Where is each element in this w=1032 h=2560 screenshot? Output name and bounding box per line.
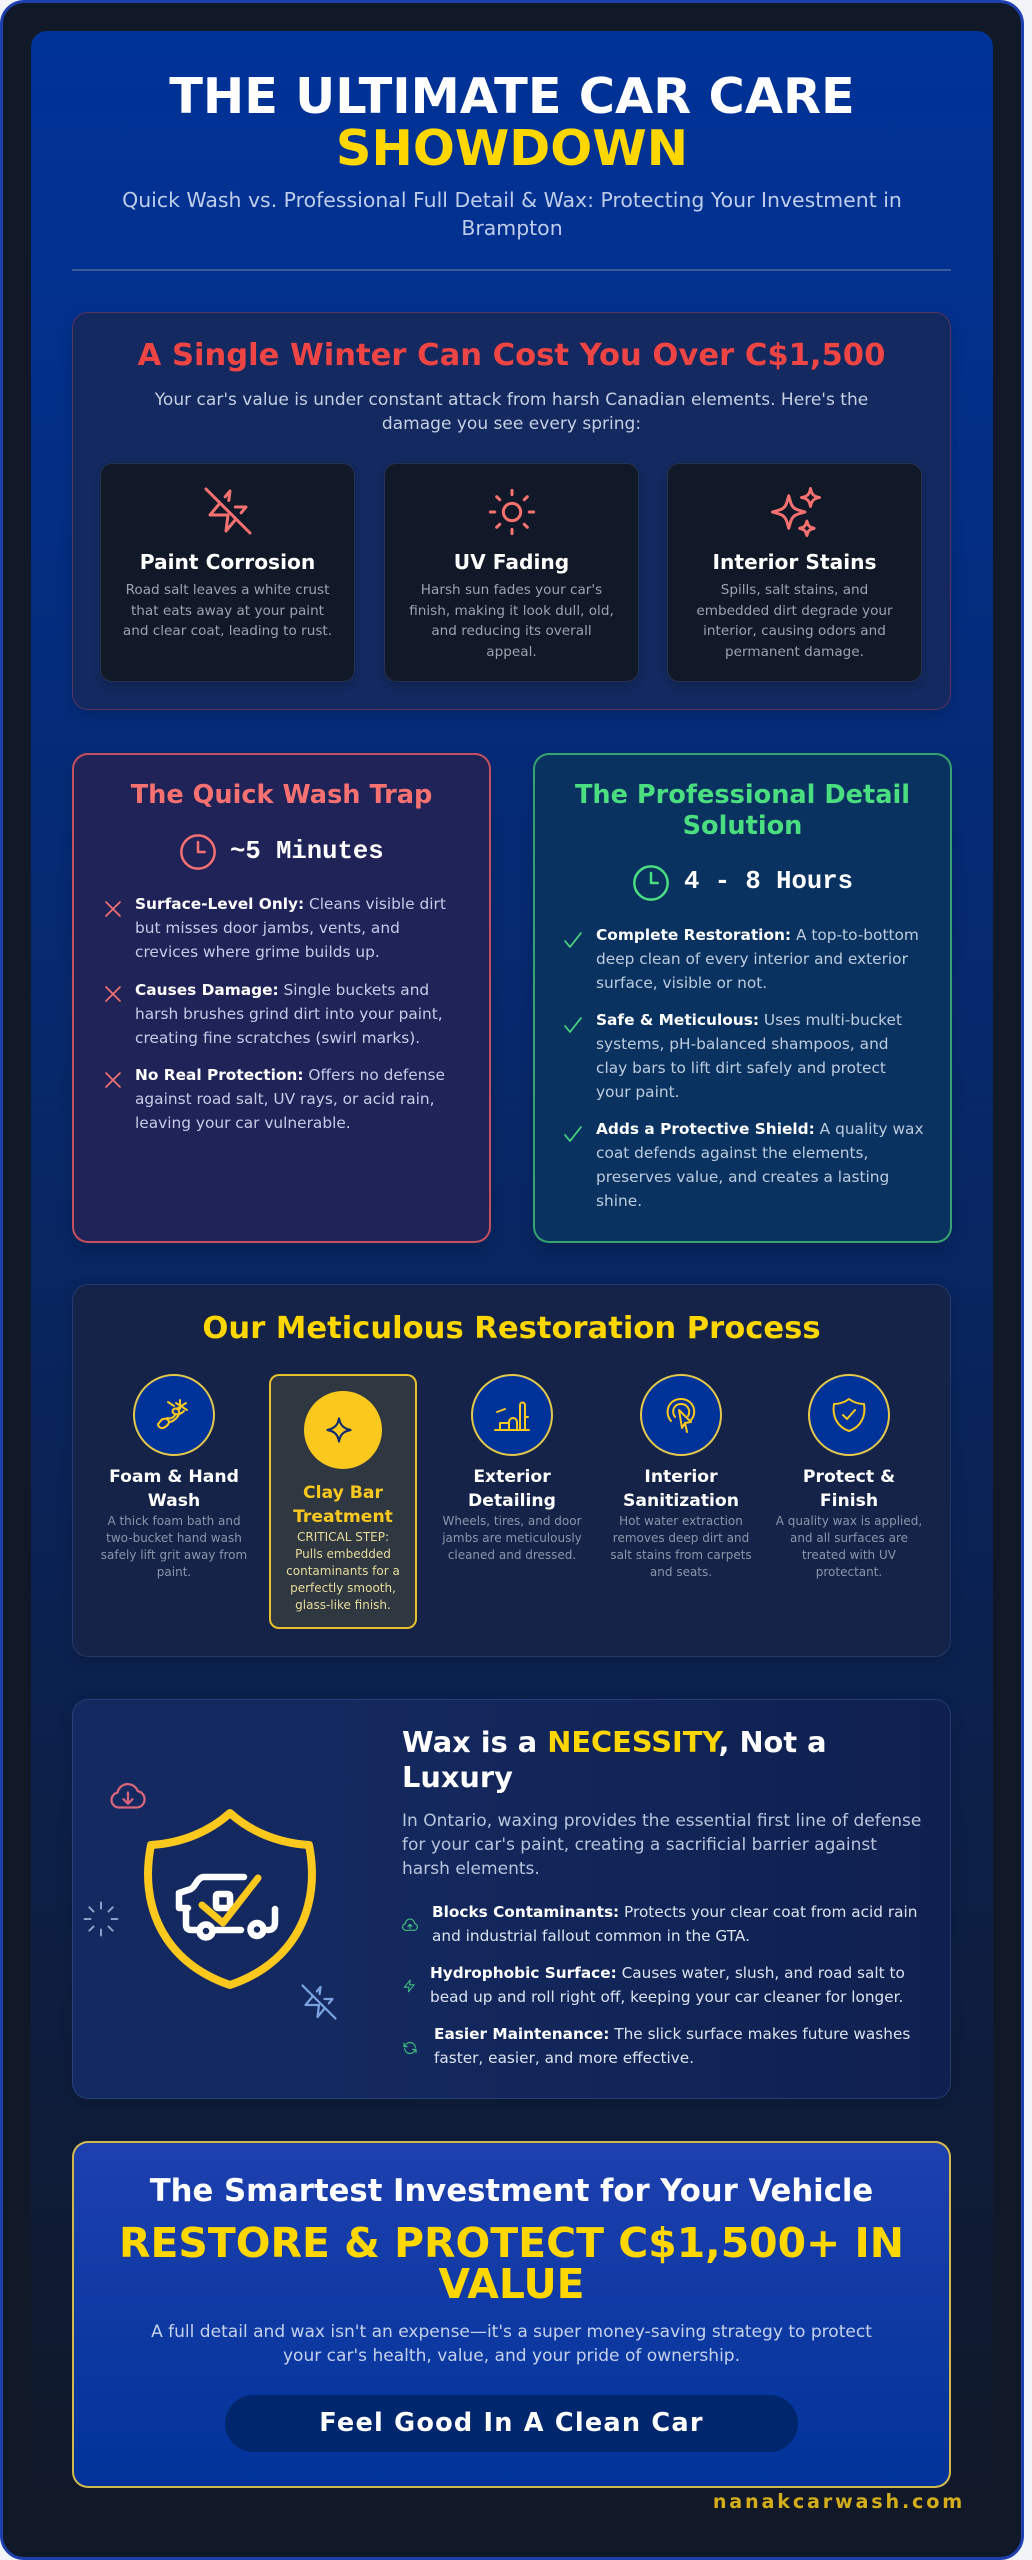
- step text: Hot water extraction: [619, 1514, 743, 1528]
- card text: Harsh sun fades your car's: [421, 582, 602, 598]
- step text: A quality wax is applied,: [776, 1514, 922, 1528]
- card text: interior, causing odors and: [703, 623, 886, 639]
- car icon: [179, 1877, 275, 1938]
- step title: [293, 1483, 393, 1527]
- heading: process: Our Meticulous Restoration Process: [202, 1311, 821, 1346]
- item: complete restoration: surface, visible or not.: [596, 974, 767, 992]
- heading: professional detail: The Professional Detail: [575, 780, 910, 810]
- time: 4-8 hours: 4 - 8 Hours: [684, 867, 853, 896]
- panel: call to action: [72, 2141, 951, 2488]
- card text: appeal.: [486, 644, 537, 660]
- title: THE ULTIMATE CAR CARE: [169, 67, 855, 125]
- icon: cloud: [402, 1917, 418, 1933]
- step text: Pulls embedded: [295, 1546, 391, 1560]
- icon: check: [564, 1126, 582, 1142]
- card text: permanent damage.: [725, 644, 864, 660]
- step title: Clay Bar: [303, 1483, 383, 1503]
- icon: sun: [488, 488, 536, 536]
- shield outline: [148, 1813, 312, 1985]
- step text: [776, 1514, 922, 1578]
- card text: Road salt leaves a white crust: [126, 582, 329, 598]
- step text: cleaned and dressed.: [448, 1548, 576, 1562]
- card text: finish, making it look dull, old,: [409, 602, 614, 618]
- card text: [409, 582, 614, 660]
- panel: winter damage: [72, 312, 951, 710]
- step: clay bar highlighted: [269, 1374, 417, 1629]
- benefit: easier maintenance: faster, easier, and more effective.: [434, 2049, 694, 2067]
- value statement: [72, 2223, 951, 2305]
- text: wax intro: [402, 1809, 921, 1881]
- item: safe and meticulous: clay bars to lift dirt safely and protect: [596, 1059, 886, 1077]
- benefit: easier maintenance: [434, 2022, 910, 2070]
- step: foam wash: [101, 1374, 247, 1578]
- card text: [123, 582, 332, 639]
- card: interior stains: [667, 463, 922, 682]
- card: uv fading: [384, 463, 639, 682]
- step title: [109, 1467, 239, 1511]
- item: surface level: [135, 895, 446, 961]
- item: safe and meticulous: your paint.: [596, 1083, 680, 1101]
- icon: clock green: [633, 865, 669, 901]
- step: interior sanitization: [610, 1374, 752, 1578]
- icon: sparkles: [771, 487, 821, 537]
- step text: removes deep dirt and: [613, 1530, 749, 1544]
- step title: Exterior: [473, 1467, 551, 1487]
- subtitle: Brampton: [461, 216, 563, 240]
- item: safe and meticulous: systems, pH-balanced shampoos, and: [596, 1035, 889, 1053]
- heading: wax: [402, 1725, 827, 1794]
- step title: [623, 1467, 739, 1511]
- icon: exterior bars: [471, 1374, 553, 1456]
- icon: clock red: [180, 834, 216, 870]
- step text: and all surfaces are: [790, 1530, 908, 1544]
- text: wax intro: for your car's paint, creating a sacrificial barrier against: [402, 1835, 877, 1855]
- step text: [101, 1514, 247, 1578]
- step text: treated with UV: [802, 1548, 896, 1562]
- item: no protection: leaving your car vulnerable.: [135, 1114, 351, 1132]
- item: causes damage: Causes Damage: Single buckets and: [135, 981, 429, 999]
- card text: Spills, salt stains, and: [721, 582, 868, 598]
- item: no protection: against road salt, UV rays, or acid rain,: [135, 1090, 435, 1108]
- text: damage intro: damage you see every spring:: [382, 414, 641, 434]
- icon: refresh: [402, 2040, 418, 2056]
- card text: and clear coat, leading to rust.: [123, 623, 332, 639]
- illustration: shield with car: [84, 1783, 337, 2020]
- step text: [286, 1530, 400, 1612]
- heading: professional detail: Solution: [683, 810, 802, 840]
- heading: winter cost: A Single Winter Can Cost You Over C$1,500: [138, 338, 885, 373]
- icon: x: [105, 986, 121, 1002]
- step: exterior detailing: [442, 1374, 582, 1562]
- step text: jambs are meticulously: [442, 1530, 582, 1544]
- icon: zap: [402, 1978, 416, 1994]
- item: no protection: No Real Protection: Offers no defense: [135, 1066, 445, 1084]
- title: SHOWDOWN: [336, 119, 688, 177]
- step title: [468, 1467, 556, 1511]
- item: complete restoration: Complete Restoration: A top-to-bottom: [596, 926, 919, 944]
- item: protective shield: preserves value, and creates a lasting: [596, 1168, 889, 1186]
- step title: [803, 1467, 895, 1511]
- icon: shield check: [808, 1374, 890, 1456]
- card text: and reducing its overall: [431, 623, 592, 639]
- value statement: RESTORE & PROTECT C$1,500+ IN: [119, 2219, 904, 2267]
- step text: [442, 1514, 582, 1562]
- title: [169, 67, 855, 177]
- step title: Interior: [644, 1467, 718, 1487]
- time: 5 minutes: ~5 Minutes: [230, 837, 384, 866]
- footer website: nanakcarwash.com: [713, 2490, 965, 2513]
- text: damage intro: [154, 390, 868, 434]
- benefit: blocks contaminants: Blocks Contaminants: Protects your clear coat from acid rain: [432, 1903, 917, 1921]
- benefit: blocks contaminants: and industrial fallout common in the GTA.: [432, 1927, 750, 1945]
- text: damage intro: Your car's value is under constant attack from harsh Canadian elements. Here's the: [155, 390, 868, 410]
- step title: Detailing: [468, 1491, 556, 1511]
- panel: wax necessity: [72, 1699, 951, 2099]
- step title: Finish: [820, 1491, 878, 1511]
- text: wax intro: harsh elements.: [402, 1859, 540, 1879]
- item: causes damage: creating fine scratches (swirl marks).: [135, 1029, 420, 1047]
- item: safe and meticulous: Safe & Meticulous: Uses multi-bucket: [596, 1011, 902, 1029]
- step title: Wash: [148, 1491, 200, 1511]
- item: protective shield: [596, 1120, 924, 1210]
- step title: Foam & Hand: [109, 1467, 239, 1487]
- icon: zap off: [204, 487, 252, 535]
- item: causes damage: [135, 981, 443, 1047]
- item: safe and meticulous: [596, 1011, 902, 1101]
- heading: smartest investment: The Smartest Investment for Your Vehicle: [150, 2174, 873, 2209]
- benefit: hydrophobic: bead up and roll right off, keeping your car cleaner for longer.: [430, 1988, 903, 2006]
- text: cta body: [72, 2320, 951, 2368]
- icon: check: [564, 932, 582, 948]
- button: feel good: [225, 2395, 798, 2452]
- item: complete restoration: deep clean of every interior and exterior: [596, 950, 908, 968]
- step title: Protect &: [803, 1467, 895, 1487]
- item: complete restoration: [596, 926, 919, 992]
- step text: paint.: [157, 1564, 191, 1578]
- card text: embedded dirt degrade your: [696, 602, 893, 618]
- step text: A thick foam bath and: [107, 1514, 241, 1528]
- item: surface level: Surface-Level Only: Cleans visible dirt: [135, 895, 446, 913]
- icon: foam brush: [133, 1374, 215, 1456]
- icon: loader: [84, 1902, 118, 1936]
- icon: extraction pointer: [640, 1374, 722, 1456]
- text: wax intro: In Ontario, waxing provides the essential first line of defense: [402, 1811, 921, 1831]
- item: causes damage: harsh brushes grind dirt into your paint,: [135, 1005, 443, 1023]
- item: surface level: crevices where grime builds up.: [135, 943, 380, 961]
- step text: [610, 1514, 752, 1578]
- item: surface level: but misses door jambs, vents, and: [135, 919, 400, 937]
- benefit: hydrophobic: Hydrophobic Surface: Causes water, slush, and road salt to: [430, 1964, 905, 1982]
- heading: wax: Luxury: [402, 1760, 513, 1794]
- step text: safely lift grit away from: [101, 1548, 247, 1562]
- item: protective shield: shine.: [596, 1192, 642, 1210]
- step text: CRITICAL STEP:: [297, 1530, 389, 1544]
- step: protect and finish: [776, 1374, 922, 1578]
- step text: Wheels, tires, and door: [442, 1514, 582, 1528]
- benefit: easier maintenance: Easier Maintenance: The slick surface makes future washes: [434, 2025, 910, 2043]
- card title: UV Fading: [454, 550, 569, 574]
- check mark: [202, 1878, 258, 1923]
- icon: cloud download: [111, 1784, 145, 1808]
- heading: wax: Wax is a NECESSITY, Not a: [402, 1725, 827, 1759]
- benefit: blocks contaminants: [432, 1900, 917, 1948]
- icon: x: [105, 901, 121, 917]
- icon: check: [564, 1017, 582, 1033]
- text: cta body: A full detail and wax isn't an expense—it's a super money-saving strategy to protect: [151, 2322, 872, 2342]
- panel: professional detail: [533, 753, 952, 1243]
- card title: Paint Corrosion: [140, 550, 315, 574]
- card text: that eats away at your paint: [131, 602, 324, 618]
- button: feel good: Feel Good In A Clean Car: [319, 2408, 704, 2438]
- step text: salt stains from carpets: [610, 1548, 752, 1562]
- heading: professional detail: [575, 780, 910, 840]
- subtitle: Quick Wash vs. Professional Full Detail & Wax: Protecting Your Investment in: [122, 188, 902, 212]
- item: protective shield: coat defends against the elements,: [596, 1144, 868, 1162]
- step text: protectant.: [816, 1564, 882, 1578]
- icon: zap off: [302, 1986, 336, 2018]
- benefit: hydrophobic: [430, 1961, 905, 2009]
- step title: Sanitization: [623, 1491, 739, 1511]
- card: paint corrosion: [100, 463, 355, 682]
- text: cta body: your car's health, value, and your pride of ownership.: [283, 2346, 740, 2366]
- step text: glass-like finish.: [295, 1598, 391, 1612]
- panel: restoration process: [72, 1284, 951, 1657]
- subtitle: [122, 188, 902, 240]
- icon: yellow sparkle: [304, 1391, 382, 1469]
- heading: quick wash: The Quick Wash Trap: [131, 780, 432, 810]
- value statement: VALUE: [438, 2260, 585, 2308]
- step text: perfectly smooth,: [290, 1580, 396, 1594]
- card text: [696, 582, 893, 660]
- step title: Treatment: [293, 1507, 393, 1527]
- step text: and seats.: [650, 1564, 712, 1578]
- item: no protection: [135, 1066, 445, 1132]
- panel: quick wash trap: [72, 753, 491, 1243]
- step text: two-bucket hand wash: [106, 1530, 242, 1544]
- icon: x: [105, 1072, 121, 1088]
- card title: Interior Stains: [712, 550, 877, 574]
- step text: contaminants for a: [286, 1564, 400, 1578]
- item: protective shield: Adds a Protective Shield: A quality wax: [596, 1120, 924, 1138]
